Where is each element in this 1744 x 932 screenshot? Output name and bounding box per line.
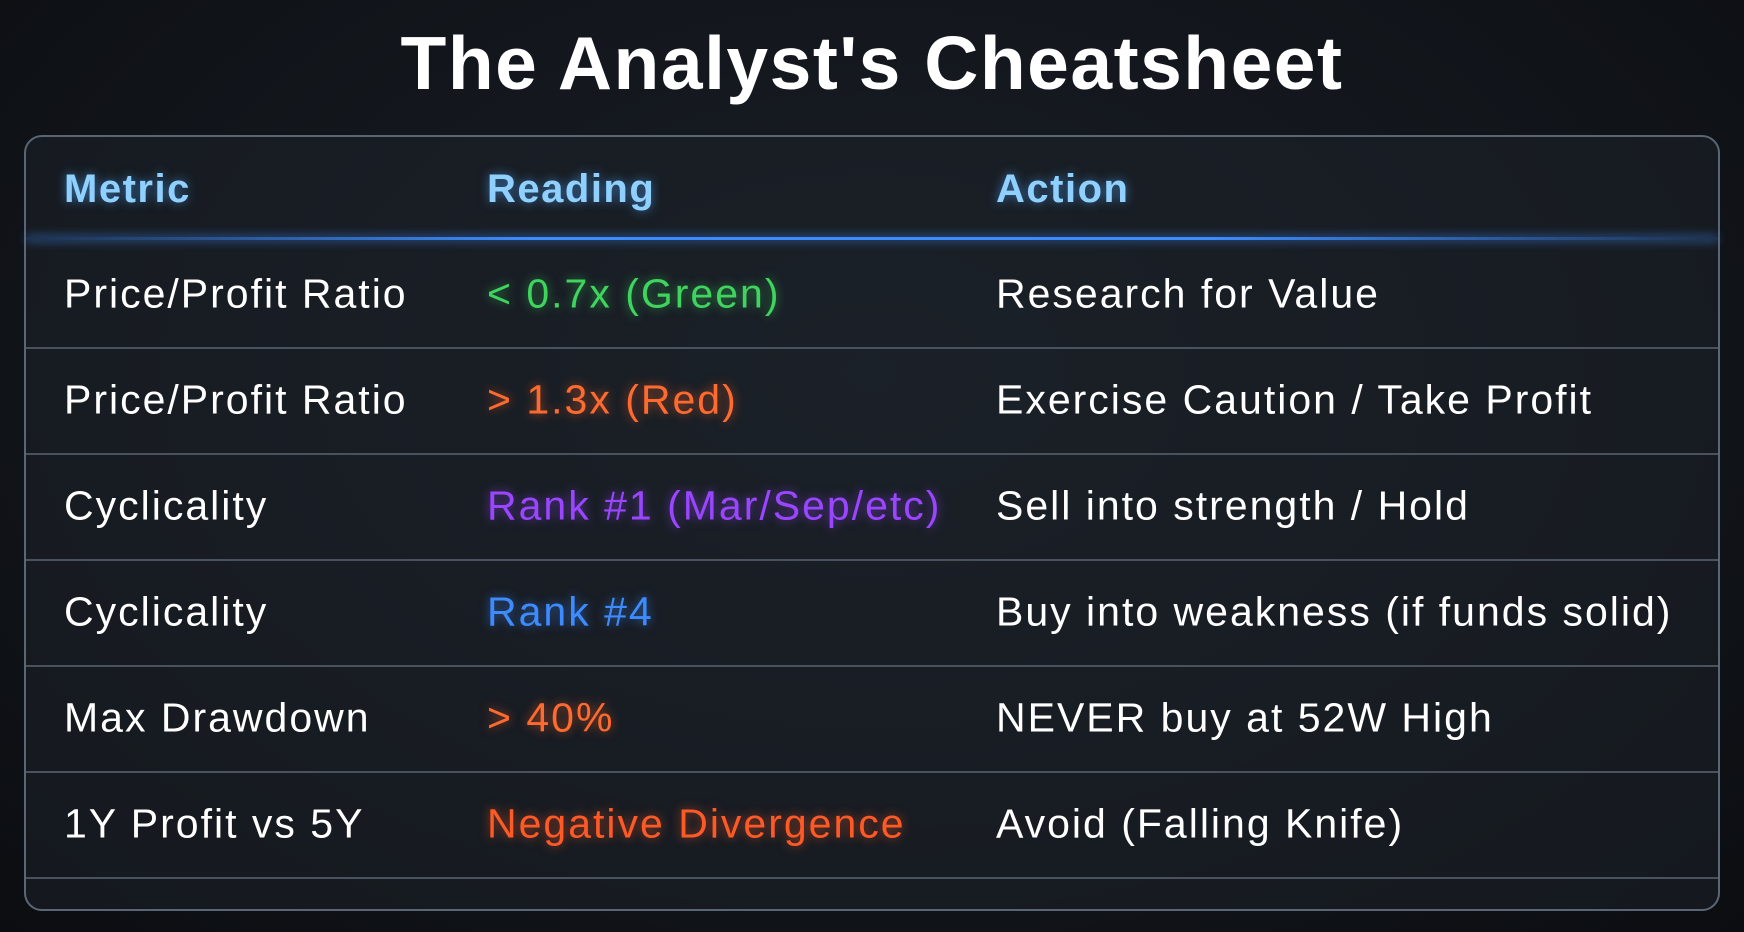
row 1: Price/Profit Ratio xyxy=(64,270,408,316)
row 3: Sell into strength / Hold xyxy=(996,482,1470,528)
row 4 xyxy=(26,559,1718,667)
row 5: Max Drawdown xyxy=(64,694,371,740)
row 3 xyxy=(26,453,1718,561)
row 4: Buy into weakness (if funds solid) xyxy=(996,588,1672,634)
row 2: Price/Profit Ratio xyxy=(64,376,408,422)
row 4: Cyclicality xyxy=(64,588,268,634)
row 6: 1Y Profit vs 5Y xyxy=(64,800,364,846)
row 4: Rank #4 xyxy=(487,588,654,634)
row 6: Avoid (Falling Knife) xyxy=(996,800,1404,846)
row 5: NEVER buy at 52W High xyxy=(996,694,1494,740)
row 1: < 0.7x (Green) xyxy=(487,270,780,316)
row 3: Rank #1 (Mar/Sep/etc) xyxy=(487,482,941,528)
row 5: > 40% xyxy=(487,694,614,740)
row 2: Exercise Caution / Take Profit xyxy=(996,376,1593,422)
header: Action: Action xyxy=(996,167,1129,211)
header: Metric: Metric xyxy=(64,167,191,211)
title: The Analyst's Cheatsheet xyxy=(400,21,1344,105)
row 1: Research for Value xyxy=(996,270,1380,316)
row 5 xyxy=(26,665,1718,773)
row 6: Negative Divergence xyxy=(487,800,906,846)
row 3: Cyclicality xyxy=(64,482,268,528)
row 6 xyxy=(26,771,1718,879)
row 2 xyxy=(26,347,1718,455)
header: Reading: Reading xyxy=(487,167,655,211)
row 2: > 1.3x (Red) xyxy=(487,376,738,422)
row 1 xyxy=(26,241,1718,349)
